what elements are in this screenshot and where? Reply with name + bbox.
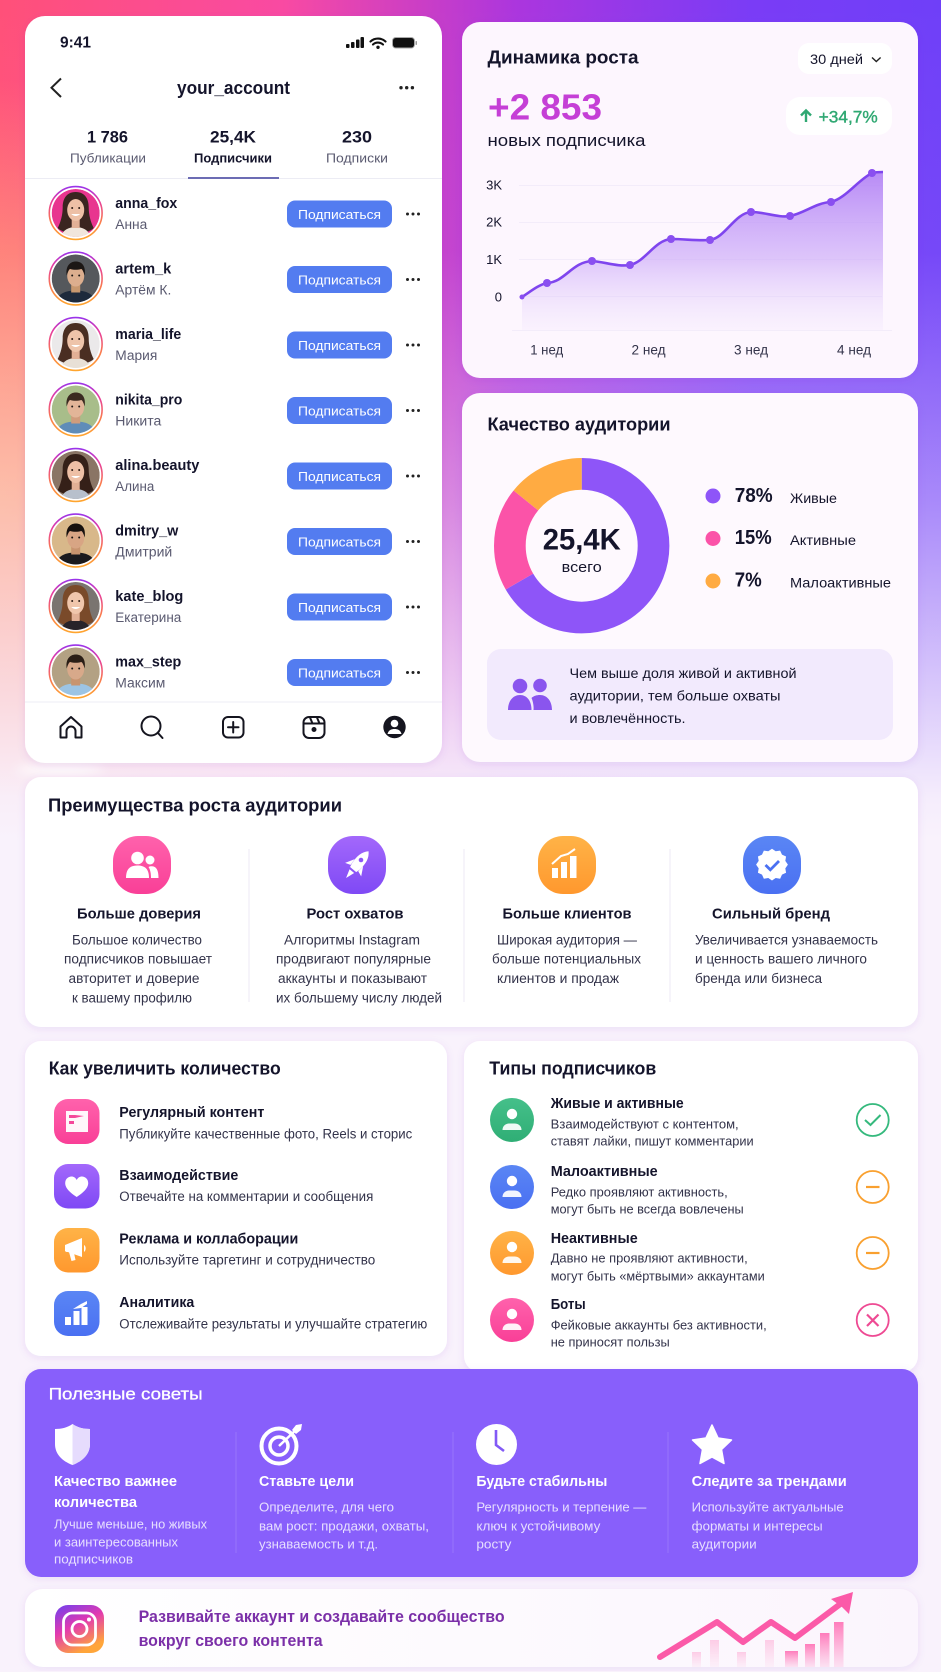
note box: Чем выше доля живой и активной [570,665,796,681]
benefit: clients: больше потенциальных [492,952,641,966]
profile header: your_account [177,78,290,98]
heading: Преимущества роста аудитории [48,794,342,816]
follower row: max_step: Подписаться [298,666,381,680]
tip: goals: Определите, для чего [259,1500,394,1514]
type: bots [490,1297,889,1350]
benefit: trust: Большое количество [72,932,202,948]
benefit: reach: аккаунты и показывают [278,971,427,986]
heading: Динамика роста [488,46,639,68]
item: engagement [54,1164,373,1208]
donut chart: 25,4K [543,524,621,556]
panel: phone followers list [25,16,442,763]
tip: goals: вам рост: продажи, охваты, [259,1518,429,1534]
benefit: clients: Широкая аудитория — [497,932,637,948]
line chart: 3 нед [734,342,768,358]
benefit: trust: авторитет и доверие [68,971,200,986]
item: regular content: Регулярный контент [119,1105,264,1121]
follower row: max_step [49,645,420,698]
type: low activity: Редко проявляют активность, [551,1184,728,1200]
panel: how to increase [25,1041,447,1356]
follower row: maria_life: maria_life [115,326,181,343]
follower row: anna_fox [49,187,420,239]
item: analytics [54,1291,427,1336]
panel: benefits [25,777,918,1027]
follower row: max_step: max_step [115,654,181,670]
donut legend: 78% [735,485,773,507]
item: ads and collaborations: Реклама и коллаборации [119,1232,298,1248]
follower row: artem_k: Артём К. [115,282,171,298]
benefit: brand: Увеличивается узнаваемость [695,932,878,948]
period dropdown [798,43,892,74]
heading: Полезные советы [49,1384,203,1404]
donut legend: Малоактивные [790,574,891,590]
note box: и вовлечённость. [570,710,686,726]
tip: trends: аудитории [692,1536,757,1552]
type: inactive [490,1231,889,1284]
follower row: kate_blog: kate_blog [115,588,183,605]
type: bots: Фейковые аккаунты без активности, [551,1318,767,1332]
benefit: trust: Больше доверия [77,906,201,922]
heading: Качество аудитории [488,414,670,434]
item: ads and collaborations [54,1228,375,1272]
growth percent badge: +34,7% [819,108,878,126]
benefit: brand: Сильный бренд [712,906,830,922]
follower row: dmitry_w: Дмитрий [115,544,172,560]
call to action text [139,1608,505,1650]
donut chart: всего [562,560,602,576]
profile stats tabs [25,128,442,179]
line chart: 4 нед [837,342,871,358]
bottom navigation bar [25,702,442,738]
follower row: maria_life [49,318,420,370]
follower row: kate_blog: Подписаться [298,600,381,615]
panel: audience quality [462,393,918,762]
item: regular content: Публикуйте качественные фото, Reels и сторис [119,1126,413,1142]
new followers caption: новых подписчика [488,132,646,150]
heading: Типы подписчиков [489,1058,656,1078]
tip: trends: Следите за трендами [692,1474,847,1490]
follower row: dmitry_w [49,514,420,567]
tip: quality [54,1424,207,1566]
status bar [60,34,417,52]
benefit: trust [64,836,212,1006]
follower row: kate_blog [49,580,420,632]
follower row: alina.beauty: Алина [115,479,155,494]
type: inactive: могут быть «мёртвыми» аккаунтами [551,1268,765,1284]
follower row: max_step: Максим [115,676,165,690]
follower row: nikita_pro: Подписаться [298,404,381,418]
profile header [52,78,414,98]
profile stats tabs: Подписчики [194,150,272,166]
follower row: maria_life: Мария [115,348,157,363]
type: bots: не приносят пользы [551,1334,670,1350]
follower row: artem_k [49,252,420,305]
heading: Как увеличить количество [49,1058,281,1078]
benefit: reach: Рост охватов [306,906,404,922]
donut legend: 15% [735,527,772,549]
benefit: trust: к вашему профилю [72,990,192,1006]
follower row: dmitry_w: dmitry_w [115,522,179,540]
tip: quality: Лучше меньше, но живых [54,1516,207,1532]
benefit: clients [492,836,641,986]
tip: stability: Регулярность и терпение — [476,1500,646,1514]
benefit: brand [695,836,878,986]
tip: goals: узнаваемость и т.д. [259,1536,378,1552]
benefit: clients: Больше клиентов [502,906,632,922]
growth percent badge [786,97,892,135]
call to action text: Развивайте аккаунт и создавайте сообщество [139,1608,505,1626]
tip: quality: количества [54,1495,138,1511]
tip: goals: Ставьте цели [259,1474,354,1490]
benefit: reach: их большему числу людей [276,990,442,1006]
tip: quality: подписчиков [54,1552,133,1566]
type: inactive: Неактивные [551,1231,638,1247]
profile stats tabs: Публикации [70,150,146,166]
tip: goals [259,1424,429,1552]
type: low activity: Малоактивные [551,1164,658,1180]
panel: useful tips [25,1369,918,1577]
profile stats tabs: 230 [342,128,372,146]
growth arrow graphic [660,1592,853,1667]
tip: stability: ключ к устойчивому [476,1518,601,1534]
follower row: anna_fox: Анна [115,217,148,232]
tip: stability: росту [476,1536,512,1552]
donut legend: Живые [790,490,837,506]
item: regular content [54,1099,413,1144]
tip: stability: Будьте стабильны [476,1474,607,1490]
period dropdown: 30 дней [810,51,863,67]
donut legend [706,485,891,592]
line chart: 1 нед [530,342,563,358]
follower row: nikita_pro [49,383,420,436]
profile stats tabs: 25,4K [210,128,257,146]
follower row: dmitry_w: Подписаться [298,534,381,550]
item: ads and collaborations: Используйте таргетинг и сотрудничество [119,1252,375,1268]
line chart: 0 [495,290,502,304]
item: engagement: Отвечайте на комментарии и сообщения [119,1189,373,1204]
line chart: 2K [486,214,502,230]
type: low activity: могут быть не всегда вовлечены [551,1202,744,1216]
follower row: nikita_pro: Никита [115,414,162,428]
item: analytics: Аналитика [119,1295,195,1311]
benefit: brand: бренда или бизнеса [695,971,822,986]
tip: quality: Качество важнее [54,1474,177,1490]
item: analytics: Отслеживайте результаты и улучшайте стратегию [119,1316,427,1332]
benefit: brand: и ценность вашего личного [695,952,867,966]
note box [487,649,893,740]
type: inactive: Давно не проявляют активности, [551,1250,748,1266]
line chart: 3K [486,178,502,192]
follower row: anna_fox: Подписаться [298,207,381,222]
follower row: kate_blog: Екатерина [115,610,182,625]
follower row: artem_k: Подписаться [298,272,381,288]
line chart: 2 нед [632,342,666,358]
tip: quality: и заинтересованных [54,1534,178,1550]
benefit: clients: клиентов и продаж [497,971,619,986]
panel: growth dynamics [462,22,918,378]
big number: +2 853 [488,86,602,128]
type: live and active: Живые и активные [550,1096,684,1112]
follower row: alina.beauty: Подписаться [298,469,381,484]
benefit: reach: Алгоритмы Instagram [284,932,420,948]
follower row: anna_fox: anna_fox [115,195,178,212]
panel: follower types [464,1041,918,1372]
benefit: reach: продвигают популярные [276,952,431,966]
line chart [486,169,892,358]
donut chart [510,474,654,618]
item: engagement: Взаимодействие [119,1168,238,1184]
tip: trends: форматы и интересы [692,1518,823,1534]
line chart: 1K [486,252,502,267]
tip: stability [476,1424,646,1552]
tip: trends [692,1425,847,1552]
benefit: trust: подписчиков повышает [64,952,212,966]
follower row: artem_k: artem_k [115,260,172,278]
status bar: 9:41 [60,34,91,52]
note box: аудитории, тем больше охваты [570,688,780,704]
panel: footer banner [25,1589,918,1667]
benefit: reach [276,836,442,1006]
type: live and active [490,1096,889,1148]
type: live and active: Взаимодействуют с контентом, [551,1116,739,1132]
donut legend: Активные [790,532,856,548]
type: bots: Боты [551,1297,586,1313]
icon: instagram logo [55,1605,104,1653]
profile stats tabs: 1 786 [87,128,128,146]
follower row: maria_life: Подписаться [298,338,381,353]
type: live and active: ставят лайки, пишут комментарии [551,1134,754,1148]
call to action text: вокруг своего контента [139,1632,323,1650]
tip: trends: Используйте актуальные [692,1500,844,1514]
follower row: alina.beauty [49,449,420,501]
follower row: nikita_pro: nikita_pro [115,392,182,408]
donut legend: 7% [735,570,762,592]
profile stats tabs: Подписки [326,150,388,166]
type: low activity [490,1164,889,1216]
follower row: alina.beauty: alina.beauty [115,457,200,474]
